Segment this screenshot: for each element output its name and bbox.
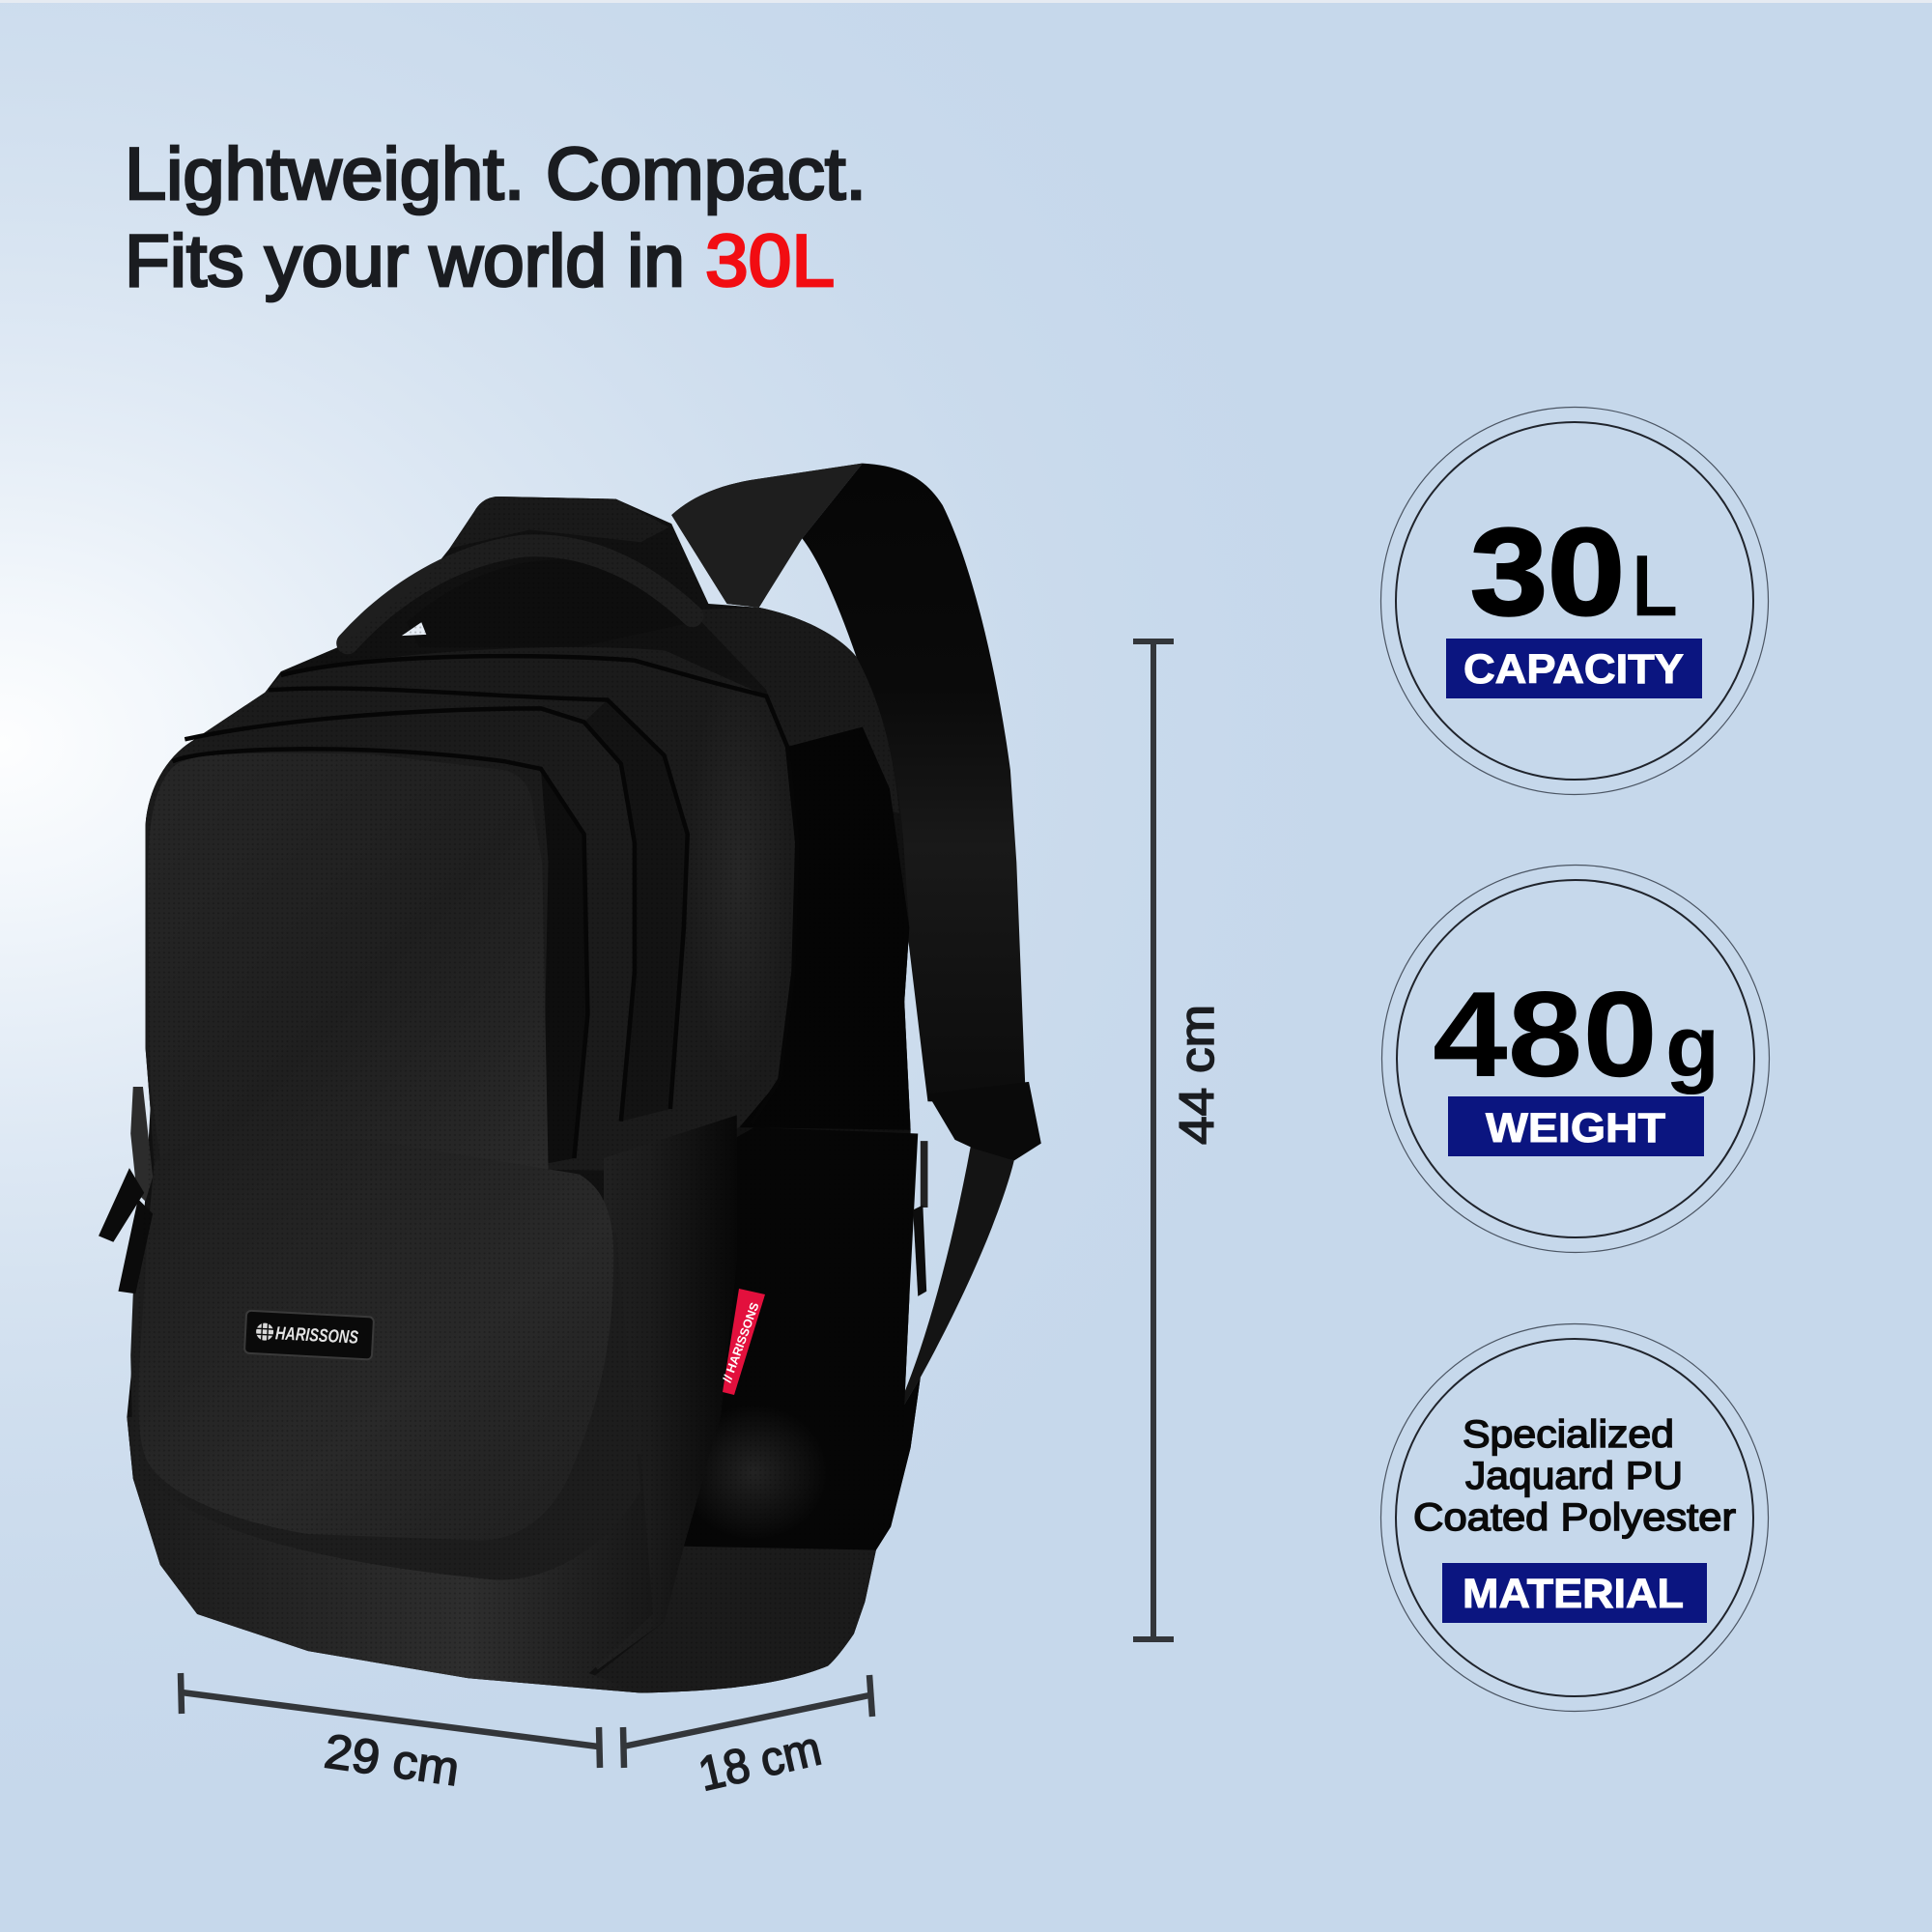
handle gap highlight [402,622,426,636]
capacity label: CAPACITY [1463,646,1684,693]
right zipper slider [921,1141,927,1208]
left puller 1 [99,1168,144,1242]
material label bar [1442,1563,1707,1623]
right zipper [913,1141,927,1296]
logo disc [256,1322,274,1341]
left zipper [99,1087,153,1293]
material description [1413,1413,1736,1539]
depth label: 18 cm [694,1720,826,1802]
top grab base [450,497,669,549]
weight badge [1381,866,1770,1252]
backpack illustration [99,464,1041,1693]
tag text: // HARISSONS [721,1300,762,1384]
depth bracket [623,1675,872,1768]
title line 2: Fits your world in [125,220,685,302]
left puller 2 [118,1199,153,1293]
weight inner ring [1397,880,1754,1237]
front block [146,647,797,1171]
zipper band sheen [688,666,791,1084]
weight label: WEIGHT [1486,1105,1665,1151]
under handle area [407,559,721,647]
weight value: 480 [1433,966,1658,1102]
weight label bar [1448,1096,1704,1156]
title line 1: Lightweight. Compact. [125,133,867,215]
bottom back [591,1547,876,1693]
depth dimension [623,1675,872,1802]
zipper band shadow 1 [541,769,587,1164]
height bracket [1133,641,1174,1639]
title [125,133,867,302]
left zipper slider [130,1087,153,1202]
front upper panel [148,753,549,1171]
capacity outer ring [1381,408,1768,794]
material outer ring [1381,1323,1768,1712]
black back shadow [739,727,911,1130]
capacity value: 30 [1470,503,1625,641]
fabric weave texture [127,497,911,1693]
width label: 29 cm [321,1723,463,1796]
title highlight 30L: 30L [705,220,835,302]
pocket rim [130,1233,640,1580]
shoulder strap front [671,464,863,608]
body silhouette [127,497,921,1693]
material inner ring [1396,1339,1753,1696]
weight outer ring [1381,866,1770,1252]
zipper band shadow 2 [584,699,688,1122]
bottom band [127,1417,653,1693]
width dimension [181,1673,600,1796]
side pocket sheen [680,1405,828,1540]
brand patch [244,1311,374,1359]
material line 3: Coated Polyester [1413,1496,1736,1539]
side gusset [518,1115,737,1669]
capacity unit: L [1632,540,1677,633]
lower front pocket [139,1139,613,1541]
material badge [1381,1323,1768,1712]
patch logo [256,1322,274,1341]
red side tag [721,1289,765,1395]
strap buckle [927,1082,1041,1161]
top back panel [690,608,899,813]
strap front overlap [671,464,863,608]
patch base [244,1311,374,1359]
material line 1: Specialized [1463,1413,1674,1456]
patch text: HARISSONS [274,1323,359,1349]
side pocket [684,1127,921,1550]
carry handle [348,546,693,643]
height label: 44 cm [1170,1005,1224,1145]
zipper seams [173,656,797,1158]
shoulder strap mesh [802,464,1029,1103]
tag shape [723,1289,765,1395]
lower strap webbing [902,1145,1014,1405]
material line 2: Jaquard PU [1465,1455,1683,1497]
material label: MATERIAL [1463,1571,1684,1617]
capacity badge [1381,408,1768,794]
right zipper puller [913,1205,926,1296]
capacity label bar [1446,639,1702,698]
capacity inner ring [1396,422,1753,780]
weight unit: g [1665,999,1719,1095]
width bracket [181,1673,600,1768]
